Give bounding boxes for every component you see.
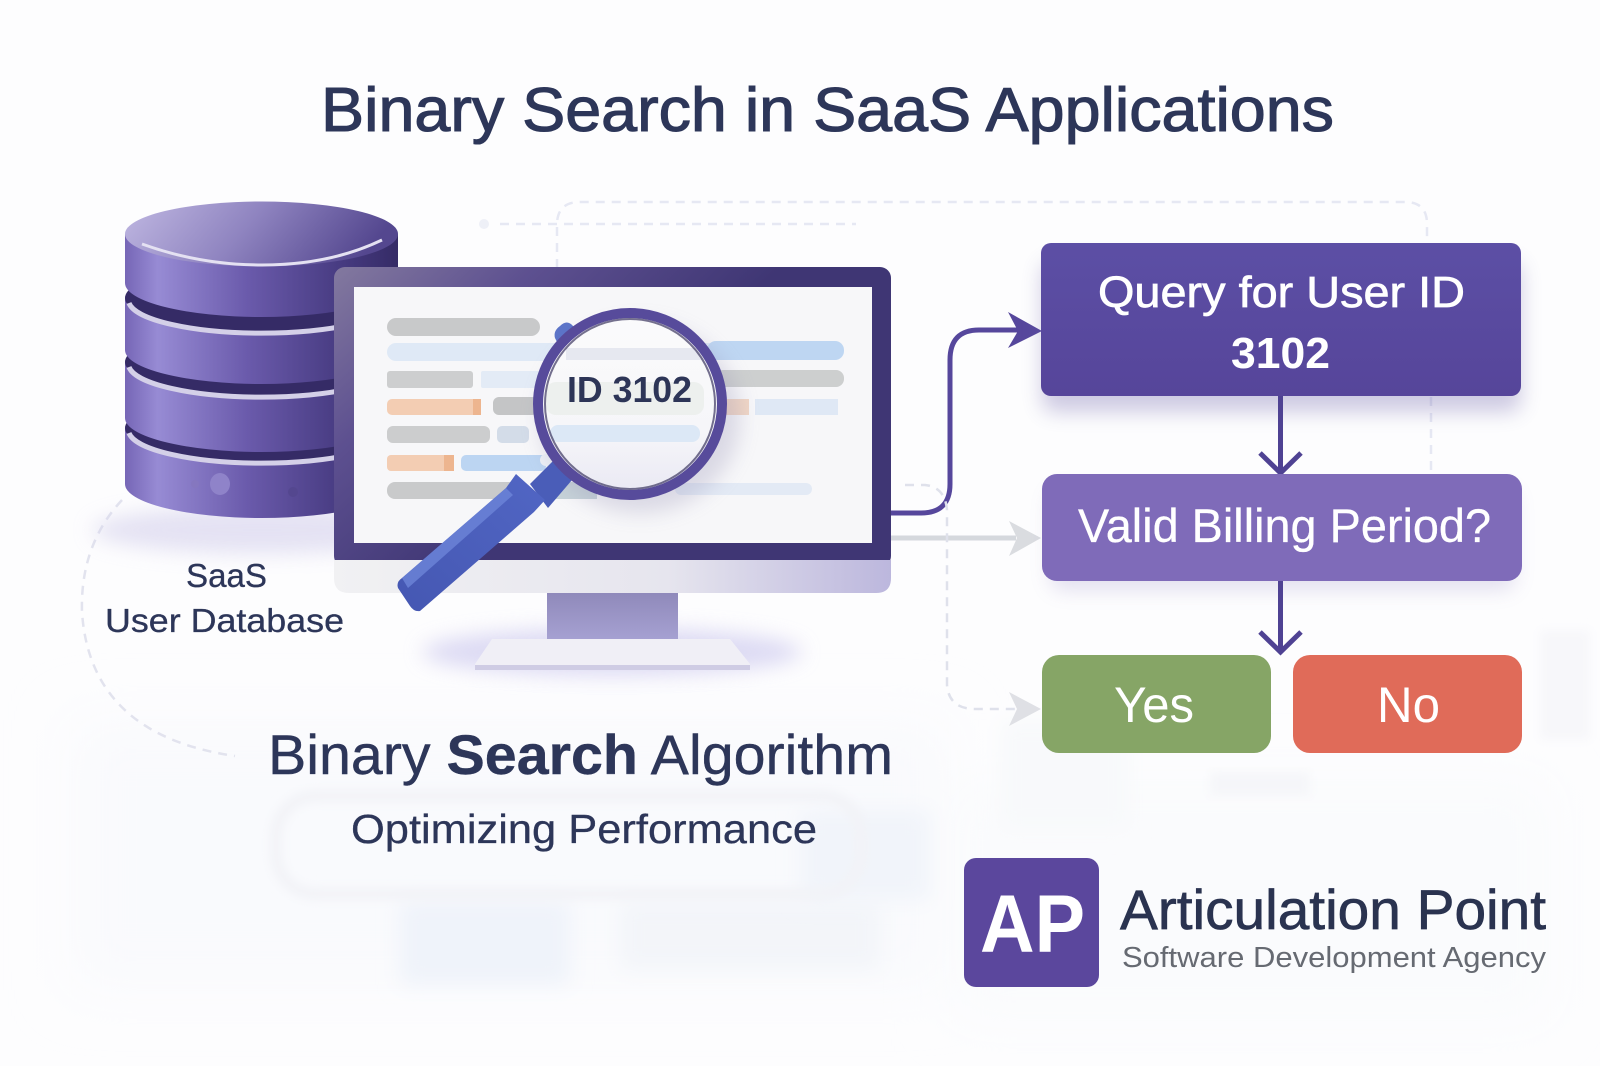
logo mark: AP bbox=[980, 879, 1085, 970]
lens faint row bbox=[566, 348, 707, 360]
flow box: billing period: Valid Billing Period? bbox=[1078, 499, 1491, 552]
icon: database cylinder bbox=[92, 202, 432, 554]
monitor stand bbox=[475, 592, 750, 670]
arrow: monitor to query bbox=[891, 312, 1042, 513]
algorithm subheading: Optimizing Performance bbox=[351, 806, 817, 852]
logo wordmark: Software Development Agency bbox=[1122, 942, 1547, 974]
database disc 1 bbox=[125, 202, 398, 317]
database disc 2 bbox=[125, 264, 398, 384]
magnifier handle bbox=[398, 322, 579, 611]
algorithm heading: Binary Search Algorithm bbox=[268, 723, 893, 786]
flow box: no bbox=[1293, 655, 1522, 753]
monitor screen bbox=[354, 287, 872, 543]
monitor frame bbox=[334, 267, 891, 567]
arrow: dashed route to yes bbox=[905, 485, 1041, 726]
icon: magnifying glass bbox=[398, 313, 740, 611]
database disc 3 bbox=[125, 328, 398, 452]
lens highlighted row bbox=[546, 382, 704, 415]
logo wordmark: Articulation Point bbox=[1120, 878, 1546, 941]
flow box: billing period bbox=[1042, 474, 1522, 590]
flow box: query bbox=[1041, 243, 1521, 412]
database label: User Database bbox=[105, 602, 344, 639]
flow box: yes: Yes bbox=[1114, 677, 1194, 733]
flow box: yes bbox=[1042, 655, 1271, 753]
decorative dashed routes bbox=[82, 202, 1431, 756]
lens search id: ID 3102 bbox=[567, 369, 692, 410]
database label: SaaS bbox=[186, 557, 267, 594]
magnifier inner rim bbox=[545, 319, 715, 489]
magnifier ring bbox=[538, 313, 722, 495]
logo mark bbox=[964, 858, 1099, 987]
monitor shadow bbox=[422, 628, 802, 676]
arrow: query to billing bbox=[1260, 396, 1301, 473]
database label bbox=[105, 557, 344, 639]
screen data rows bbox=[387, 318, 844, 499]
title: Binary Search in SaaS Applications bbox=[321, 76, 1334, 145]
database disc 4 bbox=[125, 394, 398, 518]
magnifier shadow bbox=[540, 323, 740, 513]
arrow: billing to outcomes bbox=[1260, 581, 1301, 652]
flow box: query: 3102 bbox=[1231, 329, 1330, 378]
flow box: no: No bbox=[1377, 677, 1440, 733]
arrow: monitor to billing check bbox=[891, 521, 1041, 556]
faint background texture bbox=[70, 630, 1590, 1020]
flow box: query: Query for User ID bbox=[1098, 268, 1465, 317]
lens blue row bbox=[550, 425, 700, 442]
monitor chin bbox=[334, 560, 891, 593]
magnifier glass bbox=[538, 313, 722, 495]
logo wordmark bbox=[1120, 878, 1547, 974]
icon: computer monitor bbox=[334, 267, 891, 676]
